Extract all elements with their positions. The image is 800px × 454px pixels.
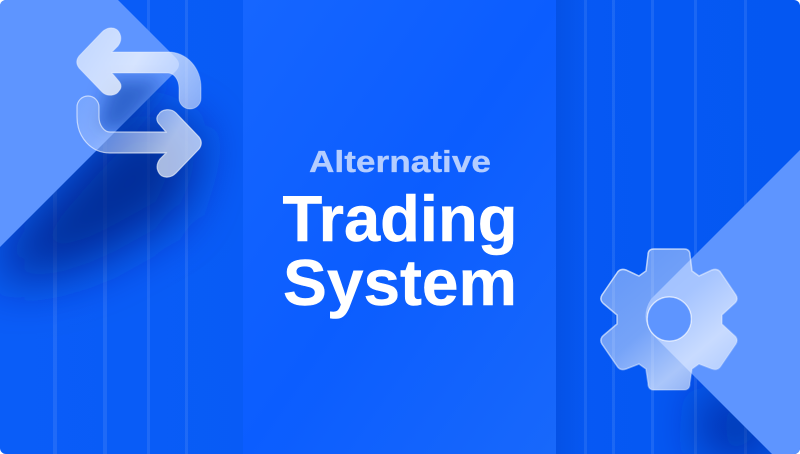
arrow pointing left bbox=[77, 28, 201, 109]
heading line: Trading: Trading bbox=[282, 182, 518, 255]
arrow pointing right bbox=[77, 96, 201, 177]
icon: exchange arrows bbox=[77, 28, 201, 177]
shadow below right triangle bbox=[700, 380, 790, 454]
vertical stripes left bbox=[53, 0, 188, 454]
triangle: top left bbox=[0, 0, 179, 247]
title block bbox=[282, 144, 518, 319]
vertical stripes right bbox=[584, 0, 747, 454]
eyebrow: Alternative: Alternative bbox=[309, 144, 491, 179]
shadow cast on left triangle by arrows bbox=[95, 80, 165, 130]
gear centre hole bbox=[647, 297, 691, 341]
icon: gear bbox=[601, 249, 737, 390]
triangle: right bbox=[646, 150, 800, 454]
center panel bbox=[243, 0, 556, 454]
shadow below left triangle bbox=[0, 105, 205, 285]
heading line: System: System bbox=[283, 246, 517, 319]
center panel edge shade bbox=[556, 0, 570, 454]
gear body bbox=[601, 249, 737, 390]
